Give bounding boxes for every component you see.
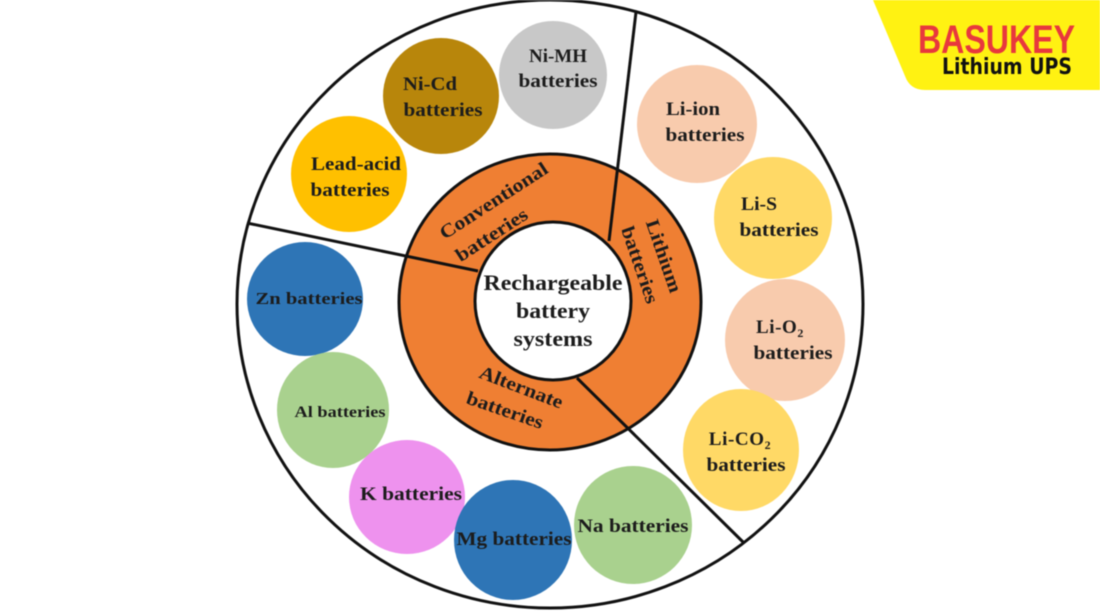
circle: Ni-MH batteries	[499, 21, 607, 129]
center label	[484, 270, 623, 351]
circle: Li-ion batteries	[637, 65, 757, 183]
circle: Li-CO2 batteries: 2	[765, 438, 771, 452]
circle: Li-O2 batteries: Li-O	[756, 317, 797, 338]
label: lithium batteries: Lithium	[641, 217, 686, 296]
center label: systems	[514, 326, 593, 351]
circle: Li-CO2 batteries	[683, 389, 799, 511]
label: lithium batteries	[616, 217, 686, 306]
circle: Lead-acid batteries	[291, 116, 407, 232]
label: alternate batteries	[464, 362, 566, 434]
center label: battery	[516, 298, 590, 323]
circle: Ni-Cd batteries	[383, 38, 499, 154]
circle: Li-O2 batteries	[725, 279, 845, 401]
circle: Mg batteries	[454, 480, 572, 600]
circle: Lead-acid batteries: batteries	[310, 180, 390, 201]
logo: Baskuey Lithium UPS: Lithium UPS	[942, 55, 1072, 80]
circle: K batteries	[349, 440, 465, 554]
circle: Zn batteries: Zn batteries	[256, 289, 363, 308]
circle: Li-S batteries: Li-S	[741, 194, 777, 215]
sector dividers	[247, 12, 743, 542]
circle: Li-ion batteries: Li-ion	[666, 99, 720, 120]
circle: Li-ion batteries: batteries	[666, 125, 744, 146]
circle: Lead-acid batteries: Lead-acid	[311, 154, 401, 175]
label: conventional batteries	[436, 159, 552, 267]
orange ring: battery categories	[399, 154, 701, 450]
circle: Li-CO2 batteries: Li-CO	[709, 429, 765, 450]
label: alternate batteries: Alternate	[476, 362, 566, 413]
circle: Al batteries: Al batteries	[294, 404, 386, 421]
circle: Ni-MH batteries: batteries	[518, 71, 598, 92]
circle: Mg batteries: Mg batteries	[456, 529, 572, 550]
circle: Li-S batteries	[714, 157, 832, 279]
label: conventional batteries: Conventional	[436, 159, 552, 244]
circle: Li-O2 batteries: batteries	[754, 343, 832, 364]
circle: Na batteries: Na batteries	[578, 516, 688, 537]
outer ring	[237, 0, 863, 608]
circle: Ni-MH batteries: Ni-MH	[529, 46, 587, 67]
label: lithium batteries: batteries	[616, 224, 662, 306]
circle: K batteries: K batteries	[360, 484, 462, 505]
circle: Na batteries	[574, 466, 692, 584]
circle: Ni-Cd batteries: Ni-Cd	[403, 74, 457, 95]
circle: Al batteries	[277, 352, 389, 468]
label: conventional batteries: batteries	[452, 204, 532, 267]
logo: Baskuey Lithium UPS	[873, 0, 1100, 90]
circle: Li-S batteries: batteries	[740, 220, 818, 241]
center label: Rechargeable	[484, 270, 623, 295]
circle: Ni-Cd batteries: batteries	[404, 100, 482, 121]
circle: Li-CO2 batteries: batteries	[706, 455, 786, 476]
circle: Li-O2 batteries: 2	[797, 326, 804, 340]
label: alternate batteries: batteries	[464, 388, 546, 434]
circle: Zn batteries	[247, 242, 363, 356]
